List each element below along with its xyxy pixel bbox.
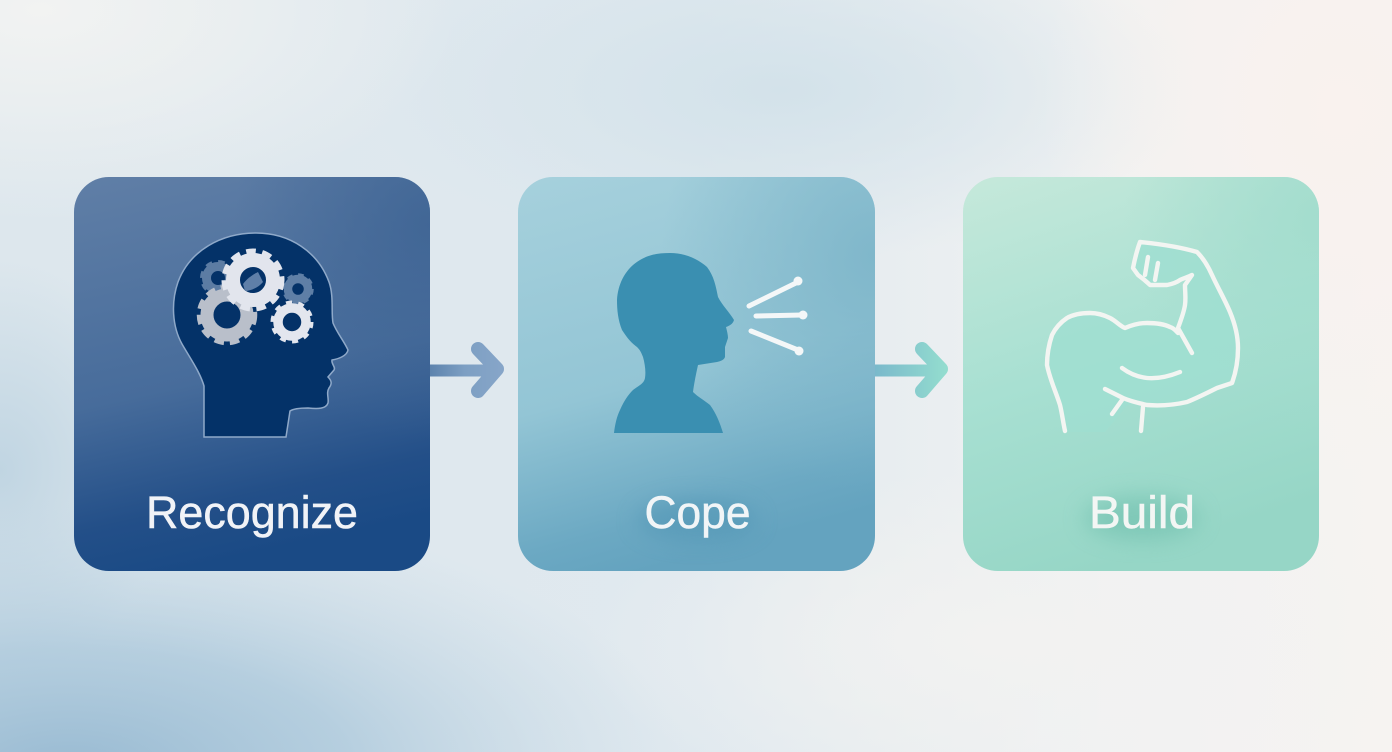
- panel: build: [963, 177, 1319, 571]
- icon: speech lines: [749, 276, 808, 356]
- icon: speaking head: [614, 253, 808, 433]
- label: Cope: Cope: [644, 487, 750, 538]
- arrow: recognize to cope: [430, 349, 497, 391]
- label: Build: Build: [1089, 487, 1195, 538]
- panel: recognize: [74, 177, 430, 571]
- label: Recognize: Recognize: [146, 487, 358, 538]
- icon: back gear right: [284, 275, 312, 303]
- icon: head with gears: [173, 233, 348, 437]
- icon: large white gear: [224, 252, 282, 308]
- icon: small white gear: [272, 302, 312, 342]
- panel: cope: [518, 177, 875, 571]
- arrow: cope to build: [875, 349, 941, 391]
- icon: back gear left: [202, 262, 234, 294]
- icon: flexed arm: [1047, 242, 1238, 432]
- icon: grey gear: [200, 288, 254, 342]
